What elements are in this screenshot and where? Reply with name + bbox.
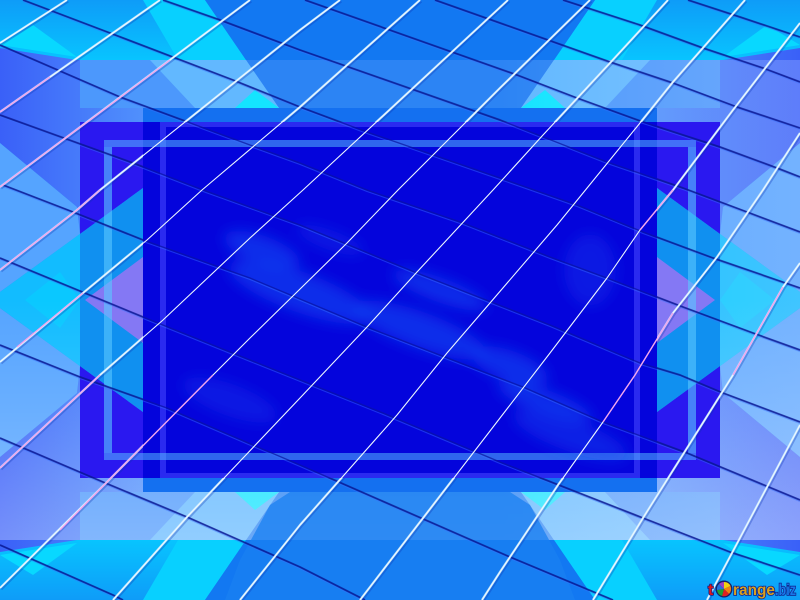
logo colour wheel — [716, 580, 732, 598]
background quadrant: bottom right — [400, 300, 800, 600]
background quadrant: bottom left — [0, 300, 400, 600]
pale lavender wash on outer panels — [0, 60, 800, 540]
logo word range: range — [733, 582, 775, 599]
background quadrant: top right — [400, 0, 800, 300]
logo letter t: t — [708, 582, 714, 599]
kaleidoscope background quadrant: top left — [0, 0, 400, 300]
central panel soft light patches — [178, 218, 632, 471]
watermark logo: torange.biz — [708, 580, 796, 599]
bottom centre blue panel — [225, 492, 575, 600]
